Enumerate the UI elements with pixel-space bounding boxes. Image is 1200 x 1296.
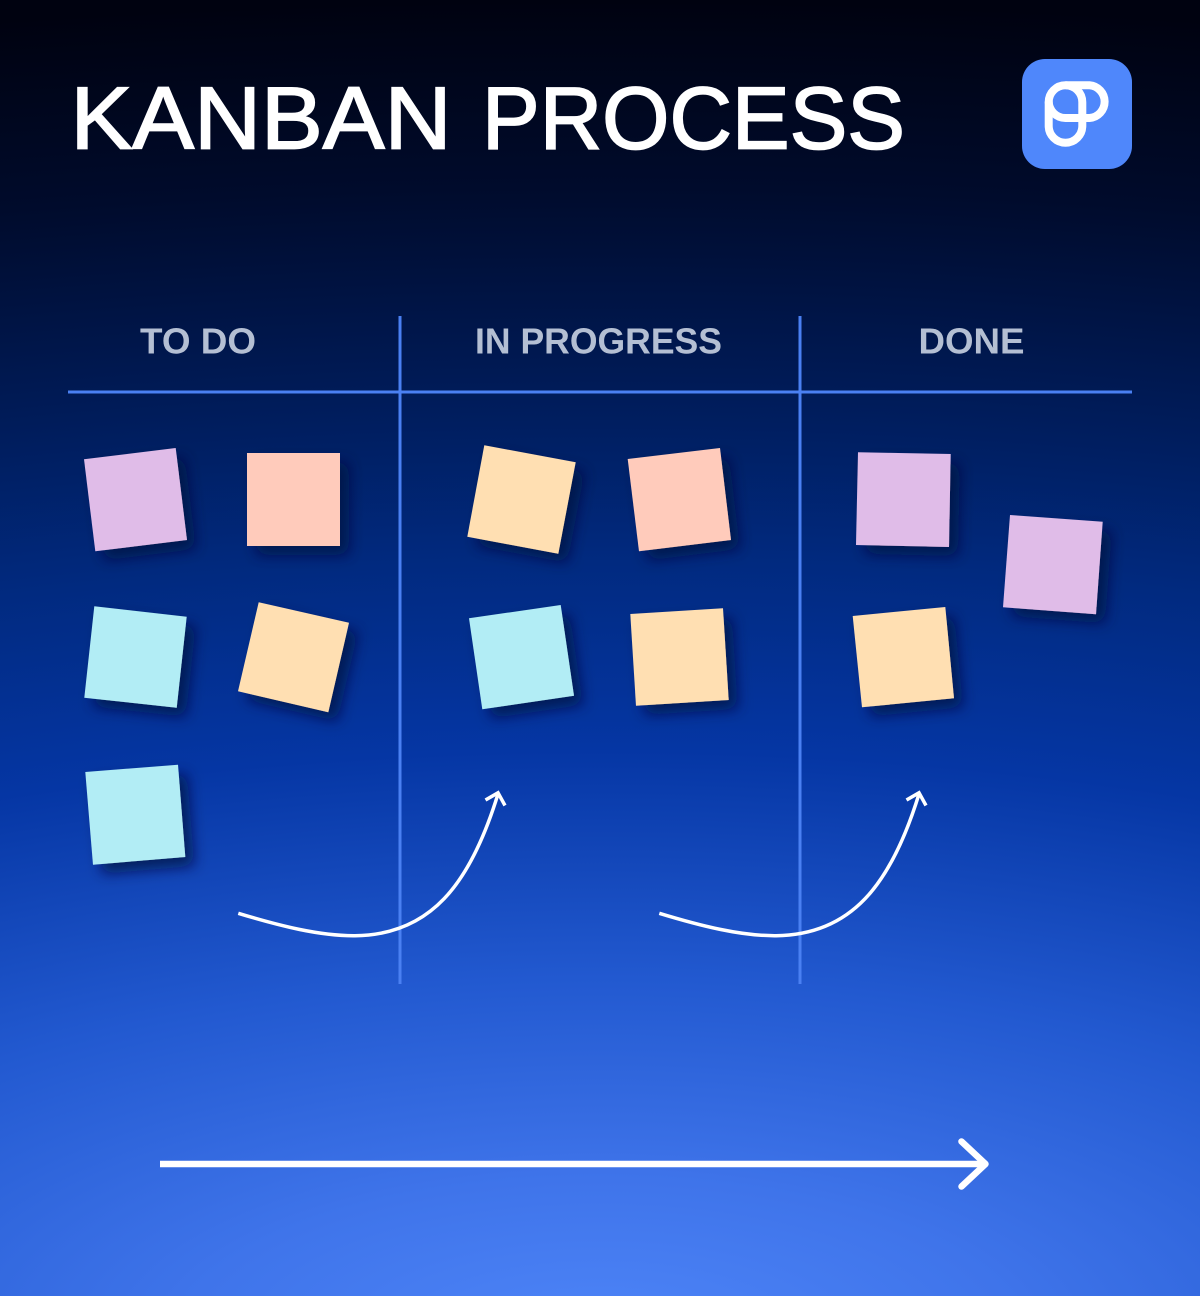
sticky note: cyan: [469, 605, 574, 709]
title: [70, 68, 905, 168]
to do column notes: [84, 448, 349, 865]
sticky note: purple: [84, 448, 187, 551]
sticky note: cyan: [85, 765, 185, 865]
sticky note: pink: [247, 453, 340, 546]
title: PROCESS: [482, 68, 905, 168]
sticky note: purple: [856, 452, 951, 547]
sticky note: orange: [238, 602, 349, 712]
sticky note: cyan: [84, 606, 187, 708]
done column notes: [853, 452, 1103, 707]
sticky note: purple: [1003, 515, 1103, 614]
sticky note: orange: [467, 445, 576, 554]
column heading: to do: TO DO: [140, 320, 256, 362]
icon: logo: [1022, 59, 1132, 169]
arrow: to do to in progress: [238, 793, 505, 936]
board grid lines: [68, 316, 1132, 984]
column heading: done: DONE: [918, 320, 1024, 362]
arrow: overall flow: [160, 1142, 986, 1186]
in progress column notes: [467, 445, 731, 709]
sticky note: orange: [630, 608, 729, 706]
sticky note: pink: [628, 448, 731, 551]
column heading: in progress: IN PROGRESS: [475, 320, 722, 362]
arrow: in progress to done: [659, 793, 926, 936]
sticky note: orange: [853, 607, 954, 707]
title: KANBAN: [70, 68, 451, 168]
